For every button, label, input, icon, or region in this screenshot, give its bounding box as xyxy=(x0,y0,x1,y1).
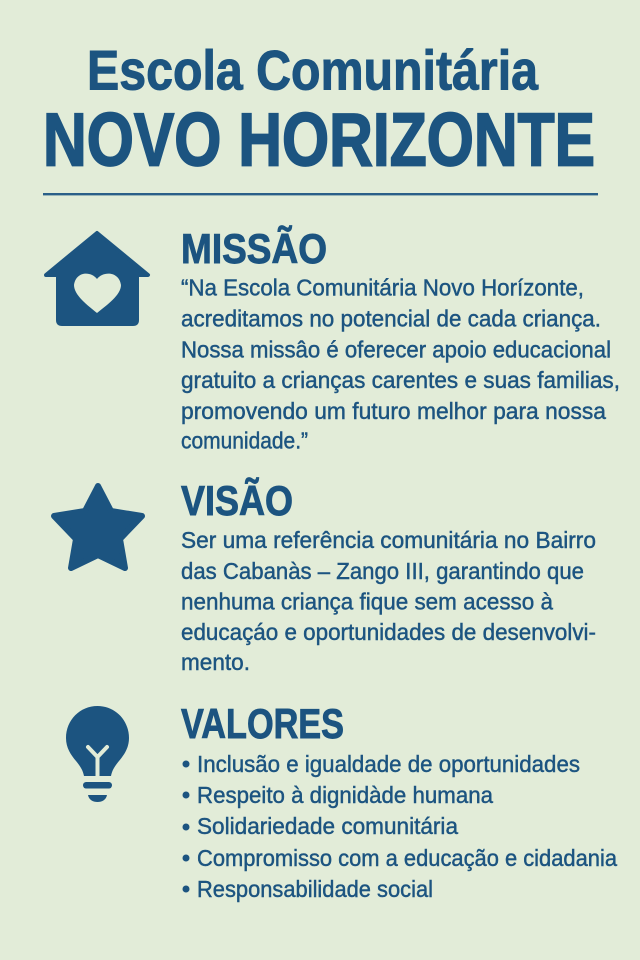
icon: light bulb xyxy=(66,706,129,802)
list: valores: Solidariedade comunitária xyxy=(197,813,459,839)
text block: visão xyxy=(181,527,596,675)
list: valores: Inclusão e igualdade de oportunidades xyxy=(197,751,580,777)
panel: visão xyxy=(181,477,596,675)
text block: visão: educaçáo e oportunidades de desenvolvi- xyxy=(181,619,596,645)
text block: visão: nenhuma criança fique sem acesso à xyxy=(181,588,554,614)
icon: house with heart xyxy=(46,233,148,324)
panel: missão xyxy=(181,225,620,454)
text block: missão: Nossa missâo é oferecer apoio educacional xyxy=(181,336,611,362)
list: valores: Respeito à dignidàde humana xyxy=(197,782,494,808)
text block: missão: comunidade.” xyxy=(181,428,308,454)
list: valores xyxy=(182,751,618,902)
list: valores: Responsabilidade social xyxy=(197,876,433,902)
text block: missão: “Na Escola Comunitária Novo Horízonte, xyxy=(181,274,584,300)
heading: visão: VISÃO xyxy=(181,477,293,524)
text block: visão: das Cabanàs – Zango III, garantindo que xyxy=(181,558,584,584)
title xyxy=(43,38,595,182)
list: valores: Compromisso com a educação e cidadania xyxy=(197,845,618,871)
title: Escola Comunitária xyxy=(87,38,539,102)
text block: missão xyxy=(181,274,620,454)
heading: valores: VALORES xyxy=(181,700,344,747)
text block: missão: promovendo um futuro melhor para nossa xyxy=(181,398,607,424)
text block: missão: acreditamos no potencial de cada criança. xyxy=(181,306,601,332)
icon: star xyxy=(54,486,142,568)
text block: missão: gratuito a crianças carentes e suas familias, xyxy=(181,367,620,393)
panel: valores xyxy=(181,700,618,902)
text block: visão: Ser uma referência comunitária no Bairro xyxy=(181,527,596,553)
text block: visão: mento. xyxy=(181,649,250,675)
heading: missão: MISSÃO xyxy=(181,225,327,272)
